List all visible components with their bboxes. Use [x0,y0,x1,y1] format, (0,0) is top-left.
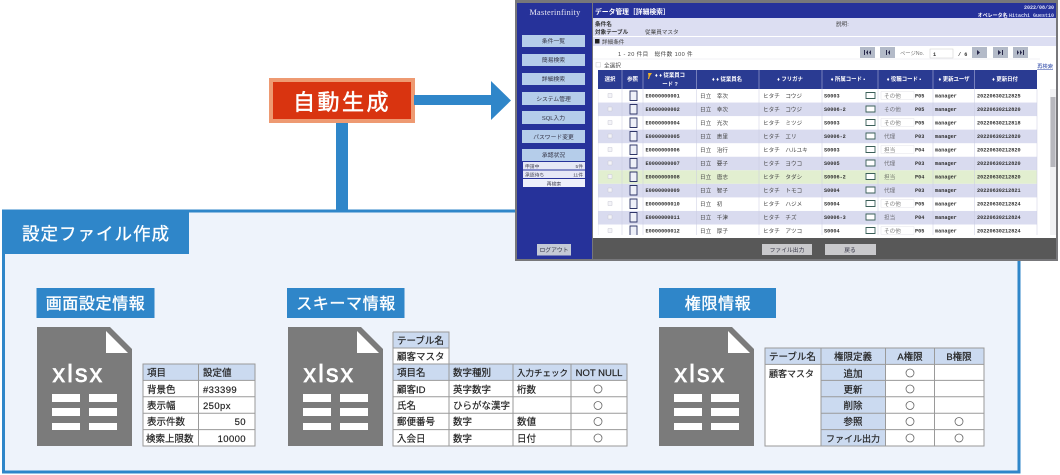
row 10: 20220630212824 [977,215,1021,221]
row 3: その他 [884,119,901,127]
row 7: manager [935,174,957,180]
filter conditions: 詳細条件 [602,38,625,46]
table: schema fields: 数値 [517,416,536,428]
row 5: 担当 [884,146,895,154]
icon: xlsx file [659,327,754,446]
row 4: ヒタチ エリ [763,132,797,140]
row 5: 20220630212820 [977,148,1021,154]
header bar: 2022/08/30 [1024,5,1054,11]
row 2: その他 [884,105,901,113]
row 1 [646,93,1020,98]
icon: xlsx file: xlsx [674,360,726,388]
sidebar navigation: Masterinfinity [529,8,581,17]
screenshot: generated management screen [515,0,1058,261]
table: screen setting values: 設定値 [203,367,232,379]
row 8: manager [935,188,957,194]
row 2: E0000000002 [646,107,680,113]
row 11: 日立 厚子 [700,227,728,235]
heading tab: settings file creation [2,210,189,254]
table: screen setting values: 背景色 [147,384,176,396]
row 11: manager [935,228,957,234]
row 9: 20220630212824 [977,202,1021,208]
row 8: P03 [915,188,924,194]
sidebar navigation: 申請中 [525,163,540,170]
sidebar navigation [517,3,592,259]
row 9: manager [935,202,957,208]
row 9: S0004 [824,202,840,208]
row 9: 日立 初 [700,200,723,208]
table: screen setting values: 項目 [147,368,166,379]
table: permissions: 更新 [843,385,863,396]
table: schema fields: 入会日 [397,433,426,445]
arrow: to generated screen [414,81,511,120]
table: screen setting values: #33399 [203,385,237,396]
row 3: E0000000004 [646,120,680,126]
row 8 [646,188,1020,193]
heading: permission info [659,288,776,318]
row 11: ヒタチ アツコ [763,227,802,235]
row 2 [646,106,1020,112]
row 6: 代理 [884,159,896,167]
data table [598,70,1037,236]
filter conditions [593,18,1056,46]
row 5 [646,146,1020,153]
table: permissions: 追加 [843,368,863,380]
row 6: E0000000007 [646,161,680,167]
select all and re-search: 再検索 [1037,62,1053,70]
row 1: その他 [884,92,901,100]
icon: xlsx file [37,327,132,446]
sidebar navigation: 詳細検索 [542,75,565,83]
icon: xlsx file: xlsx [304,360,355,388]
table header [598,70,1037,89]
row 9 [646,201,1020,206]
header bar: オペレータ名 Hitachi Guest10 [978,12,1054,19]
sidebar navigation: 11件 [573,172,583,178]
table: permissions: ファイル出力 [826,433,880,444]
row 5: S0003 [824,148,840,154]
row 2: S0006-2 [824,107,846,113]
row 1: 20220630212825 [977,94,1021,100]
row 2: manager [935,107,957,113]
table header: 参照 [627,75,638,83]
row 1: P05 [915,94,924,100]
row 4: 日立 恵里 [700,132,728,140]
row 6 [646,160,1020,166]
row 10: manager [935,215,957,221]
row 10: ヒタチ チズ [763,213,797,221]
filter conditions: 条件名 [595,20,612,28]
filter conditions: 対象テーブル [595,28,629,36]
footer bar: ファイル出力 [770,246,805,254]
row 6: 日立 要子 [700,159,728,167]
table header: ♦ 役職コード ▪ [887,75,921,83]
heading: schema info [287,288,404,318]
pagination: 1 - 20 件目 総件数 100 件 [618,50,693,58]
section: screen settings [36,288,255,446]
row 7: P04 [915,174,924,180]
table: schema fields: 英字数字 [453,384,491,396]
row 1: 日立 幸次 [700,92,728,100]
table: screen setting values: 表示件数 [147,416,186,428]
table: permissions: A権限 [897,351,923,363]
row 3: S0003 [824,120,840,126]
row 6: 20220630212820 [977,161,1021,167]
row 1: S0003 [824,94,840,100]
main content background [593,3,1056,238]
connector: panel to auto generation [336,120,348,211]
table: screen setting values: 50 [235,417,246,428]
label: auto generation [271,80,413,121]
table: schema fields: 数字種別 [453,367,491,379]
row 4: 20220630212820 [977,134,1021,140]
table: permissions [765,348,984,446]
header bar: データ管理［詳細検索］ [595,7,670,16]
header bar [593,3,1056,19]
table header: 選択 [605,75,616,83]
row 6: ヒタチ ヨウコ [763,159,802,167]
footer bar: 戻る [844,247,856,254]
row 9: E0000000010 [646,202,680,208]
row 11: その他 [884,227,901,235]
row 9: P05 [915,202,924,208]
table rows [598,89,1037,236]
row 10: 日立 千津 [700,213,728,221]
row 11: P05 [915,228,924,234]
sidebar navigation: システム管理 [536,95,571,103]
row 3: 20220630212818 [977,120,1021,126]
row 7: 20220630212820 [977,174,1021,180]
row 4: 代理 [884,132,896,140]
row 5: E0000000006 [646,148,680,154]
table header: ♦ 所属コード ▪ [831,75,865,83]
icon: xlsx file [288,327,383,446]
table header: ♦ 更新ユーザ [938,75,970,83]
row 11 [646,228,1020,234]
sidebar navigation: 承認待ち [525,172,544,178]
row 5: P04 [915,148,924,154]
sidebar navigation: ログアウト [540,246,568,254]
table: screen setting values: 250px [203,401,231,412]
table: schema fields: 入力チェック [517,368,568,378]
pagination [593,47,1040,59]
row 8: 20220630212821 [977,188,1021,194]
table: permissions: 顧客マスタ [769,368,814,379]
scrollbar [1050,89,1056,235]
table: schema fields [393,332,627,446]
table header: ♦ 更新日付 [992,75,1019,83]
table: schema fields: 日付 [517,434,536,445]
row 8: 代理 [884,186,896,194]
table: screen setting values [143,364,255,446]
table: schema fields: 氏名 [397,400,416,412]
row 4 [646,134,1020,139]
row 6: manager [935,161,957,167]
row 7: 日立 唐志 [700,173,728,181]
filter conditions: 従業員マスタ [645,28,679,36]
row 3: P05 [915,120,924,126]
table: schema fields: 項目名 [397,367,426,379]
row 5: ヒタチ ハルユキ [763,146,808,154]
table header: ♦ ♦ 従業員コ [655,71,685,79]
row 7: 担当 [884,173,895,181]
footer bar [593,238,1056,259]
table: schema fields: テーブル名 [397,335,444,347]
table: schema fields: 桁数 [517,384,536,396]
table: permissions: 参照 [843,416,863,428]
pagination: ページNo. [900,50,924,57]
row 2: 日立 幸次 [700,105,728,113]
row 2: P05 [915,107,924,113]
table header: ♦ ♦ 従業員名 [712,75,742,83]
table: schema fields: ひらがな漢字 [453,400,510,412]
row 1: manager [935,94,957,100]
select all and re-search: 全選択 [604,62,621,70]
table: schema fields: NOT NULL [576,368,622,379]
row 10: P04 [915,215,924,221]
row 2: ヒタチ コウジ [763,105,802,113]
row 3: 日立 光次 [700,119,728,127]
section: permission info [659,288,984,446]
sidebar navigation: SQL入力 [542,114,565,122]
row 3: ヒタチ ミツジ [763,119,803,127]
table: permissions: 削除 [843,400,863,412]
section: schema info [287,288,627,446]
sidebar navigation: 承認状況 [542,151,565,159]
row 7 [646,174,1020,180]
row 7: E0000000008 [646,174,680,180]
heading: schema info: スキーマ情報 [296,295,396,313]
row 1: E0000000001 [646,94,680,100]
row 2: 20220630212820 [977,107,1021,113]
panel: settings file creation [2,210,1019,472]
row 7: S0006-2 [824,174,846,180]
row 11: E0000000012 [646,228,680,234]
row 5: 日立 治行 [700,146,728,154]
heading: screen settings: 画面設定情報 [46,295,145,313]
row 10: S0006-3 [824,215,846,221]
icon: xlsx file: xlsx [52,360,104,388]
row 8: 日立 智子 [700,186,728,194]
row 7: ヒタチ タダシ [763,173,803,181]
table: schema fields: 郵便番号 [397,416,436,428]
heading: permission info: 権限情報 [685,295,751,313]
table: permissions: B権限 [946,351,972,363]
row 6: S0005 [824,161,840,167]
sidebar navigation: パスワード変更 [533,133,574,141]
row 4: E0000000005 [646,134,680,140]
row 11: 20220630212824 [977,228,1021,234]
table: permissions: 権限定義 [834,351,872,363]
filter conditions: 説明: [836,20,849,28]
table: screen setting values: 表示幅 [147,400,176,412]
pagination: / 6 [958,52,967,58]
table header: ♦ フリガナ [777,75,803,83]
heading tab: settings file creation: 設定ファイル作成 [22,224,170,244]
row 10: 担当 [884,213,895,221]
pagination: 1 [933,52,936,58]
sidebar navigation: 簡易検索 [542,56,565,64]
row 3: manager [935,120,957,126]
row 1: ヒタチ コウジ [763,92,802,100]
row 4: manager [935,134,957,140]
row 10: E0000000011 [646,215,680,221]
table header: ード ? [662,82,678,88]
row 5: manager [935,148,957,154]
row 8: E0000000009 [646,188,680,194]
row 11: S0004 [824,228,840,234]
row 8: ヒタチ トモコ [763,186,802,194]
select all and re-search [596,62,1053,70]
table: schema fields: 数字 [453,416,472,428]
row 3 [646,120,1020,126]
row 9: ヒタチ ハジメ [763,200,802,208]
sidebar navigation: 条件一覧 [542,37,565,45]
label: auto generation: 自動生成 [293,90,391,115]
sidebar navigation: 5件 [576,163,583,170]
heading: screen settings [36,288,154,318]
row 6: P03 [915,161,924,167]
row 8: S0004 [824,188,840,194]
row 4: P03 [915,134,924,140]
table: screen setting values: 検索上限数 [146,433,194,445]
table: screen setting values: 10000 [218,434,246,445]
table: schema fields: 数字 [453,433,472,445]
table: permissions: テーブル名 [769,351,816,363]
table: schema fields: 顧客ID [397,384,426,396]
row 10 [646,214,1020,220]
row 4: S0006-2 [824,134,846,140]
row 9: その他 [884,200,901,208]
table: schema fields: 顧客マスタ [397,351,445,363]
sidebar navigation: 再検索 [547,180,561,188]
